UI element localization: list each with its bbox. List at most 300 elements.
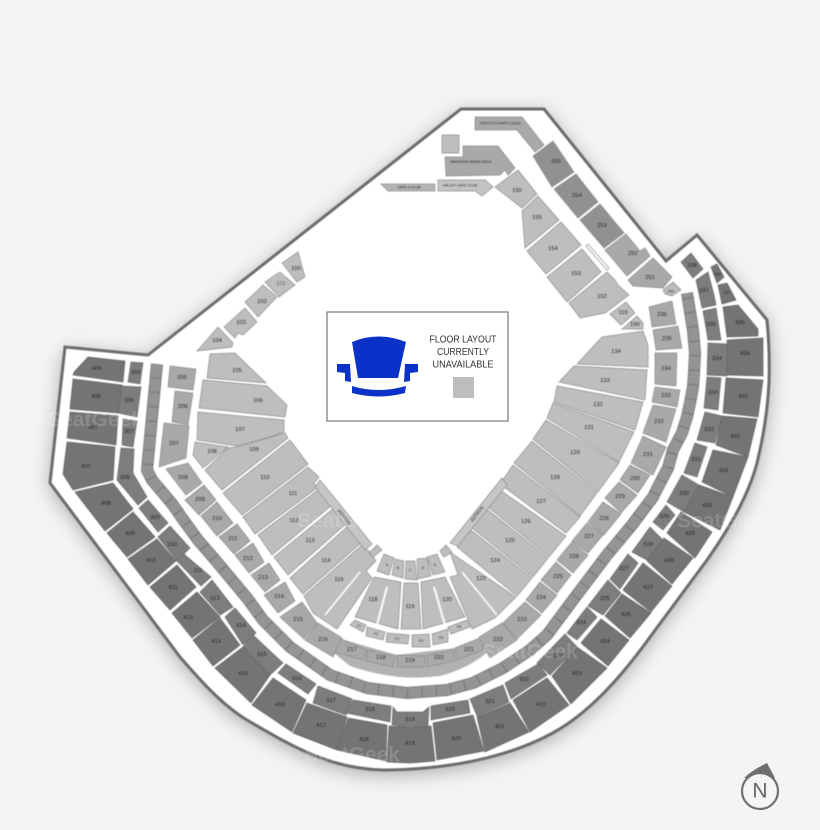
section 330: 330 <box>679 491 689 497</box>
section 114 <box>290 526 361 594</box>
floor layout note: CURRENTLY <box>437 346 489 358</box>
section 226: 226 <box>599 516 609 522</box>
section 122 <box>450 552 516 629</box>
section 250 <box>663 282 681 296</box>
section 317: 317 <box>326 698 336 704</box>
section 318 <box>346 700 391 722</box>
section 118: 118 <box>368 597 378 603</box>
section 428: 428 <box>664 558 674 564</box>
section 224 <box>526 582 557 613</box>
section 102: 102 <box>257 299 267 305</box>
section 413: 413 <box>183 615 193 621</box>
section 229 <box>605 482 637 513</box>
section 255 <box>533 141 574 187</box>
section 108 <box>193 442 228 468</box>
section 222 <box>479 623 517 658</box>
section 415: 415 <box>238 671 248 677</box>
section 331: 331 <box>691 457 701 463</box>
section 309 <box>139 500 168 532</box>
section 308 <box>117 448 147 505</box>
section 212: 212 <box>243 556 253 562</box>
section 104 <box>197 327 233 351</box>
section 407: 407 <box>81 464 91 470</box>
section 255: 255 <box>551 159 561 165</box>
section 419: 419 <box>405 741 415 747</box>
section 423: 423 <box>572 671 582 677</box>
section 109: 109 <box>249 447 259 453</box>
section 131 <box>547 403 634 462</box>
section upper right b: 338 <box>714 272 721 276</box>
seatgeek watermarks: SeatGeek <box>44 640 140 664</box>
square <box>442 135 459 153</box>
floor layout note <box>430 334 497 370</box>
section 155 <box>522 196 559 248</box>
section 155: 155 <box>532 215 542 221</box>
section 252: 252 <box>628 251 638 257</box>
brew deck: BREWERS BREW DECK <box>451 160 492 164</box>
section 110 <box>223 440 308 515</box>
section 251 <box>628 258 672 288</box>
section 209 <box>185 485 216 515</box>
section 206: 206 <box>178 404 188 410</box>
section 406: 406 <box>91 394 101 400</box>
section 232: 232 <box>654 419 664 425</box>
section 425: 425 <box>621 612 631 618</box>
section 233 <box>652 387 680 407</box>
section 110: 110 <box>260 475 270 481</box>
section 105: 105 <box>232 368 242 374</box>
section 235 <box>653 326 682 350</box>
section 111: 111 <box>289 491 297 497</box>
section 425 <box>605 594 651 638</box>
100 level sections <box>193 135 648 647</box>
brew deck <box>445 146 515 176</box>
grey legend square <box>453 377 474 398</box>
section 106: 106 <box>253 398 263 404</box>
section 119 upper: 119 <box>618 310 628 316</box>
icon: blue seat <box>337 336 418 396</box>
section 131: 131 <box>584 425 594 431</box>
section 253: 253 <box>597 223 607 229</box>
section 306: 306 <box>124 398 134 404</box>
section 417: 417 <box>316 723 326 729</box>
section 224: 224 <box>536 595 547 601</box>
section 103 <box>224 308 257 338</box>
club strip: VALLEY GATE CLUB <box>443 184 478 188</box>
section 124: 124 <box>490 558 501 564</box>
section 216: 216 <box>318 637 328 643</box>
section 310: 310 <box>167 542 177 548</box>
section 406 <box>70 379 122 413</box>
section 338: 338 <box>687 263 697 269</box>
section 227: 227 <box>584 534 594 540</box>
infield sections: A <box>386 563 389 567</box>
section 214: 214 <box>274 594 285 600</box>
section 321: 321 <box>485 699 495 705</box>
seatgeek watermarks: SeatGeek <box>297 510 393 532</box>
section 116: 116 <box>334 577 344 583</box>
section 325 <box>588 580 621 615</box>
left astros strip <box>315 480 372 550</box>
section 153 <box>547 249 601 302</box>
section 129: 129 <box>570 450 580 456</box>
section 436 <box>723 305 758 337</box>
section 414 <box>193 618 240 666</box>
club strip <box>438 180 493 196</box>
section 322 <box>505 664 547 699</box>
400 level sections <box>63 264 763 763</box>
right astros strip: ASTROS <box>469 505 485 523</box>
seatgeek watermarks: SeatGeek <box>482 640 578 664</box>
section 213: 213 <box>258 575 268 581</box>
stadium drop shadow <box>50 113 769 774</box>
floor layout panel <box>327 312 508 421</box>
front row boxes: F6 <box>457 625 461 629</box>
section 152: 152 <box>597 294 607 300</box>
gate strip <box>381 184 435 191</box>
section 323: 323 <box>553 653 563 659</box>
section 126 <box>488 490 566 557</box>
section 231 <box>631 436 666 475</box>
section 433 <box>723 378 763 417</box>
section 418: 418 <box>359 737 369 743</box>
section 210 <box>201 502 233 536</box>
section 429 <box>667 512 712 558</box>
section upper right b <box>711 264 724 283</box>
front row boxes: F4 <box>419 639 423 643</box>
section 122: 122 <box>476 576 486 582</box>
section 314: 314 <box>236 623 247 629</box>
section 330 <box>667 475 699 512</box>
section 253 <box>580 204 624 248</box>
section 220: 222 <box>434 655 444 661</box>
section 329: 329 <box>659 514 669 520</box>
section 319: 319 <box>405 717 415 723</box>
front row boxes <box>350 620 470 647</box>
section 431: 431 <box>719 468 729 474</box>
section 409 <box>107 512 155 557</box>
section 434 <box>727 338 763 376</box>
seatgeek watermarks: SeatGeek <box>304 744 400 766</box>
section 223 <box>503 602 541 639</box>
front row boxes: F1 <box>357 624 361 628</box>
section 422 <box>513 678 569 732</box>
section 410 <box>128 539 176 585</box>
section 101: 101 <box>276 281 286 287</box>
section 211 <box>219 524 250 554</box>
section 307 <box>122 419 137 447</box>
section 254: 254 <box>572 193 583 199</box>
section 332 <box>697 412 722 443</box>
section 100: 100 <box>291 266 301 272</box>
section 111 <box>243 467 319 534</box>
section 409: 409 <box>125 531 135 537</box>
section 424 <box>581 619 629 666</box>
section 429: 429 <box>685 531 695 537</box>
floor layout note: FLOOR LAYOUT <box>430 334 497 346</box>
section 424: 424 <box>600 639 611 645</box>
section 129 <box>533 420 619 492</box>
section 205 <box>168 366 196 390</box>
section 427 <box>623 563 672 612</box>
section 219 <box>397 655 425 667</box>
section 251: 251 <box>645 275 655 281</box>
section 432 <box>716 416 757 457</box>
section 327: 327 <box>619 566 629 572</box>
section 100 <box>282 252 305 282</box>
section 210: 210 <box>212 516 222 522</box>
section 325: 325 <box>600 596 610 602</box>
section 405: 405 <box>92 366 102 372</box>
seatgeek watermarks <box>44 42 773 766</box>
section 211: 211 <box>228 536 238 542</box>
seatgeek watermarks: SeatGeek <box>677 42 773 64</box>
section 311 <box>177 554 211 586</box>
section 126: 126 <box>521 519 531 525</box>
section 220 <box>427 650 455 667</box>
section 228 <box>557 542 588 573</box>
icon: north compass <box>742 763 778 809</box>
section 128: 128 <box>550 475 560 481</box>
section 319 <box>392 707 429 728</box>
section 430: 430 <box>702 503 712 509</box>
section 411: 411 <box>168 585 178 591</box>
section 316: 316 <box>292 676 302 682</box>
section 414: 414 <box>211 639 222 645</box>
section 234: 234 <box>661 366 672 372</box>
section 329 <box>653 505 675 530</box>
section 328 <box>632 527 663 560</box>
left astros strip: ASTROS <box>336 508 352 526</box>
infield sections: B <box>397 566 400 570</box>
thin strip <box>586 244 609 270</box>
section 313: 313 <box>210 596 220 602</box>
section 207 <box>159 423 189 467</box>
section 324: 324 <box>576 620 587 626</box>
section 108: 108 <box>207 449 217 455</box>
section 112: 112 <box>289 518 299 524</box>
section 213 <box>251 563 280 592</box>
section 127 <box>500 465 580 533</box>
section 216 <box>305 623 342 657</box>
party deck <box>475 117 544 152</box>
section 125 <box>472 509 548 577</box>
section 107: 107 <box>235 427 245 433</box>
section 309: 309 <box>150 515 160 521</box>
concourse ring of small sections <box>147 293 695 693</box>
section 411 <box>150 565 196 610</box>
lower level band behind sections 217-221 <box>334 637 490 678</box>
section 233: 233 <box>661 393 671 399</box>
section upper right a <box>718 283 736 304</box>
section 120 <box>421 577 465 629</box>
section 225 <box>541 562 571 593</box>
section 405 <box>73 357 125 382</box>
stadium outline <box>50 109 769 770</box>
section 109 <box>205 433 288 490</box>
section 190 <box>622 316 643 329</box>
section 250: 250 <box>668 288 675 294</box>
section 232 <box>643 405 676 442</box>
section 153: 153 <box>571 271 581 277</box>
icon: north compass: N <box>752 780 768 802</box>
section 128 <box>514 441 597 516</box>
section 234 <box>655 353 677 386</box>
section 227 <box>572 523 603 553</box>
section 418 <box>337 718 387 761</box>
section 415 <box>215 647 270 703</box>
section 119 upper <box>610 302 635 325</box>
section 333 <box>704 377 721 410</box>
section 431 <box>702 450 748 497</box>
section 215 <box>280 602 317 639</box>
section 218: 218 <box>376 655 386 661</box>
floor layout note: UNAVAILABLE <box>432 358 494 370</box>
section 305: 305 <box>131 370 141 376</box>
section 218 <box>366 650 395 667</box>
section 324 <box>567 607 597 640</box>
section 125: 125 <box>505 538 515 544</box>
section 322: 322 <box>519 677 529 683</box>
section 408 <box>75 483 133 531</box>
section 116 <box>304 545 376 629</box>
infield sections: D <box>422 566 425 570</box>
section 134: 134 <box>611 349 622 355</box>
front row boxes: F3 <box>395 637 399 641</box>
section 318: 318 <box>365 707 375 713</box>
seatgeek watermarks: SeatGeek <box>47 172 143 196</box>
section 321 <box>470 685 509 716</box>
front row boxes: F2 <box>374 632 378 636</box>
200 level sections <box>159 117 682 667</box>
section 428 <box>647 538 693 584</box>
infield sections: E <box>434 563 437 567</box>
party deck: TORCHY'S PARTY DECK <box>479 122 521 126</box>
section 320 <box>431 700 470 720</box>
section 221 <box>455 637 483 660</box>
section 208 <box>166 463 202 495</box>
section 407 upper: 407 <box>88 425 98 431</box>
section 310 <box>158 526 190 561</box>
gate strip: GATE 8 CLUB <box>397 186 421 190</box>
section 150 <box>495 170 537 208</box>
section 113 <box>274 508 347 575</box>
section 335 <box>703 308 721 340</box>
section 118 <box>355 577 401 629</box>
section 119 <box>401 583 421 629</box>
section 416: 416 <box>275 702 285 708</box>
section 225: 225 <box>553 574 563 580</box>
section 230 <box>620 465 650 493</box>
section 154: 154 <box>548 246 559 252</box>
section 132 <box>554 386 643 430</box>
section 331 <box>684 443 707 477</box>
section 433: 433 <box>738 394 748 400</box>
section 323 <box>537 634 577 675</box>
section 214 <box>264 582 295 613</box>
section 235: 235 <box>662 336 672 342</box>
section 133 <box>559 366 647 400</box>
section 226 <box>588 502 621 535</box>
section 207: 207 <box>169 441 179 447</box>
section 316 <box>278 664 316 694</box>
section 221: 221 <box>464 647 474 653</box>
section 306 <box>118 386 141 417</box>
section 313 <box>200 580 233 615</box>
section 421: 421 <box>495 724 505 730</box>
section 413 <box>172 592 220 638</box>
section 103: 103 <box>236 320 246 326</box>
section 231: 231 <box>643 452 653 458</box>
section 408: 408 <box>101 501 111 507</box>
section 421 <box>477 703 529 752</box>
section 410: 410 <box>146 558 156 564</box>
section 416 <box>252 678 306 732</box>
section 315: 315 <box>257 652 267 658</box>
seatgeek watermarks: SeatGeek <box>47 408 143 432</box>
section 215: 215 <box>293 617 303 623</box>
section 419 <box>387 726 435 763</box>
section 152 <box>569 272 629 318</box>
section 150: 150 <box>512 188 522 194</box>
section 315 <box>243 635 283 675</box>
section 338 <box>681 253 703 278</box>
seatgeek watermarks: SeatGeek <box>677 744 773 766</box>
section 430 <box>684 485 733 530</box>
section 420: 420 <box>451 736 461 742</box>
section 337: 337 <box>699 288 709 294</box>
section 254 <box>554 174 598 218</box>
section 427: 427 <box>643 585 653 591</box>
seatgeek watermarks: SeatGeek <box>677 510 773 532</box>
section 113: 113 <box>305 538 315 544</box>
section 107 <box>197 412 284 446</box>
section 114: 114 <box>321 558 331 564</box>
section 320: 320 <box>445 707 455 713</box>
section 436: 436 <box>735 320 745 326</box>
section upper right a: 337 <box>724 290 731 294</box>
section 119: 119 <box>405 604 415 610</box>
section 209: 209 <box>195 497 205 503</box>
section 102 <box>245 285 277 317</box>
right astros strip <box>450 478 507 546</box>
section 423 <box>552 647 607 704</box>
section 223: 223 <box>517 617 527 623</box>
section 190: 190 <box>630 322 640 328</box>
section 420 <box>433 715 484 760</box>
section 434: 434 <box>740 351 751 357</box>
section 311: 311 <box>193 568 203 574</box>
infield sections <box>369 545 452 580</box>
section 307: 307 <box>124 429 134 435</box>
section 328: 328 <box>643 542 653 548</box>
section 236: 236 <box>657 312 667 318</box>
section 305 <box>128 362 143 384</box>
section 314 <box>225 608 256 645</box>
section 334 <box>707 343 727 376</box>
section 133: 133 <box>600 378 610 384</box>
section 422: 422 <box>536 702 546 708</box>
section 104: 104 <box>212 338 223 344</box>
section 432: 432 <box>730 434 740 440</box>
section 252 <box>605 234 650 276</box>
section 217 <box>335 639 367 660</box>
section 229: 229 <box>615 494 625 500</box>
section 327 <box>610 554 638 589</box>
section 332: 332 <box>704 427 714 433</box>
section 407 <box>63 442 115 490</box>
front row boxes: F5 <box>439 636 443 640</box>
